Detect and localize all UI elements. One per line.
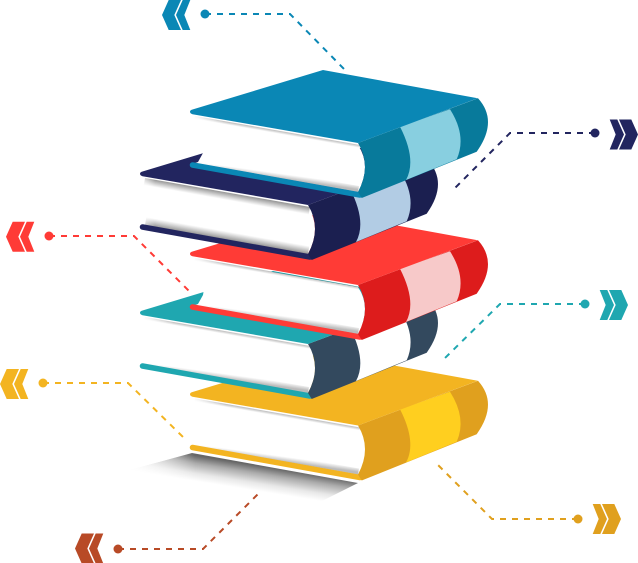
callout: amber <box>437 464 621 534</box>
book: red <box>190 212 488 340</box>
book: blue <box>190 70 488 198</box>
ground shadow <box>123 453 358 502</box>
book: navy <box>140 148 438 260</box>
callout: red <box>6 222 190 292</box>
callout: yellow <box>0 369 183 437</box>
callout: blue <box>162 0 345 70</box>
book: teal and slate <box>140 271 438 399</box>
book: yellow <box>190 352 488 480</box>
callout: navy <box>455 120 638 188</box>
callout: brown <box>75 494 258 563</box>
callout: teal <box>445 290 628 358</box>
